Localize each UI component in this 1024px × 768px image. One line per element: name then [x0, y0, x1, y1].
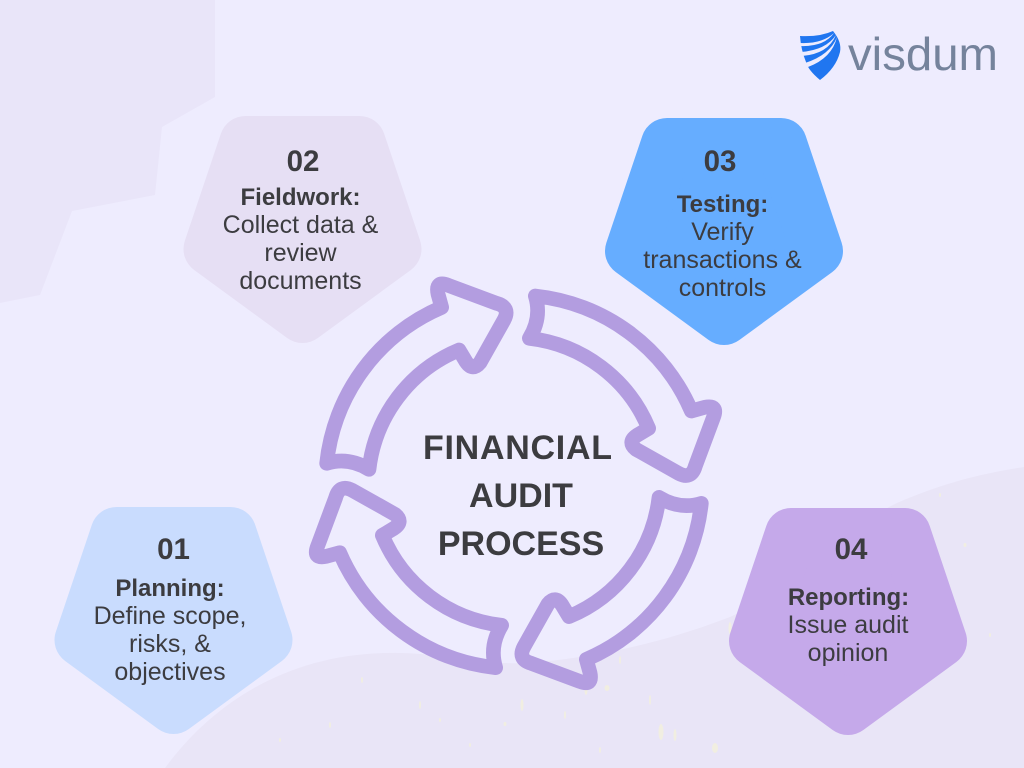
title: FINANCIAL: [423, 429, 612, 467]
background shape: top-left: [0, 0, 215, 303]
step text 03: transactions &: [643, 246, 802, 274]
step text 01: risks, &: [129, 630, 211, 658]
step text 03: controls: [679, 274, 766, 302]
step text 01: Define scope,: [94, 602, 246, 630]
step text 01: [94, 575, 246, 686]
logo wordmark: visdum: [848, 28, 998, 80]
arrow: planning to fieldwork: [327, 284, 506, 469]
panel: 01 Planning: [80, 533, 266, 708]
logo: visdum: [800, 28, 998, 80]
title: AUDIT: [469, 477, 573, 515]
step text 04: Issue audit: [788, 611, 909, 639]
step text 04: Reporting:: [788, 584, 909, 611]
step text 03: [643, 191, 802, 302]
title: [423, 429, 612, 563]
step text 04: [788, 584, 909, 667]
step number 02: 02: [287, 145, 319, 178]
panel: 02 Fieldwork: [210, 142, 396, 317]
step text 03: Verify: [691, 218, 754, 246]
arrow: reporting to planning: [316, 488, 502, 668]
arrow: testing to reporting: [522, 497, 701, 683]
step number 03: 03: [704, 145, 736, 178]
step text 02: Collect data &: [223, 211, 379, 239]
step text 03: Testing:: [677, 191, 768, 218]
background shape: bottom wave with specks: [165, 467, 1024, 768]
step text 04: opinion: [808, 639, 888, 667]
step number 01: 01: [157, 533, 190, 566]
step text 01: objectives: [114, 658, 226, 686]
panel: 03 Testing: [631, 144, 817, 319]
step text 01: Planning:: [115, 575, 225, 602]
step text 02: review: [264, 239, 338, 267]
arrow: fieldwork to testing: [529, 296, 715, 475]
icon: shield: [800, 31, 840, 80]
step text 02: [223, 184, 379, 295]
step text 02: Fieldwork:: [240, 184, 361, 211]
title: PROCESS: [438, 525, 604, 563]
cycle diagram: four arrows: [316, 284, 715, 683]
step number 04: 04: [835, 533, 868, 566]
step text 02: documents: [239, 267, 362, 295]
panel: 04 Reporting: [755, 533, 941, 709]
